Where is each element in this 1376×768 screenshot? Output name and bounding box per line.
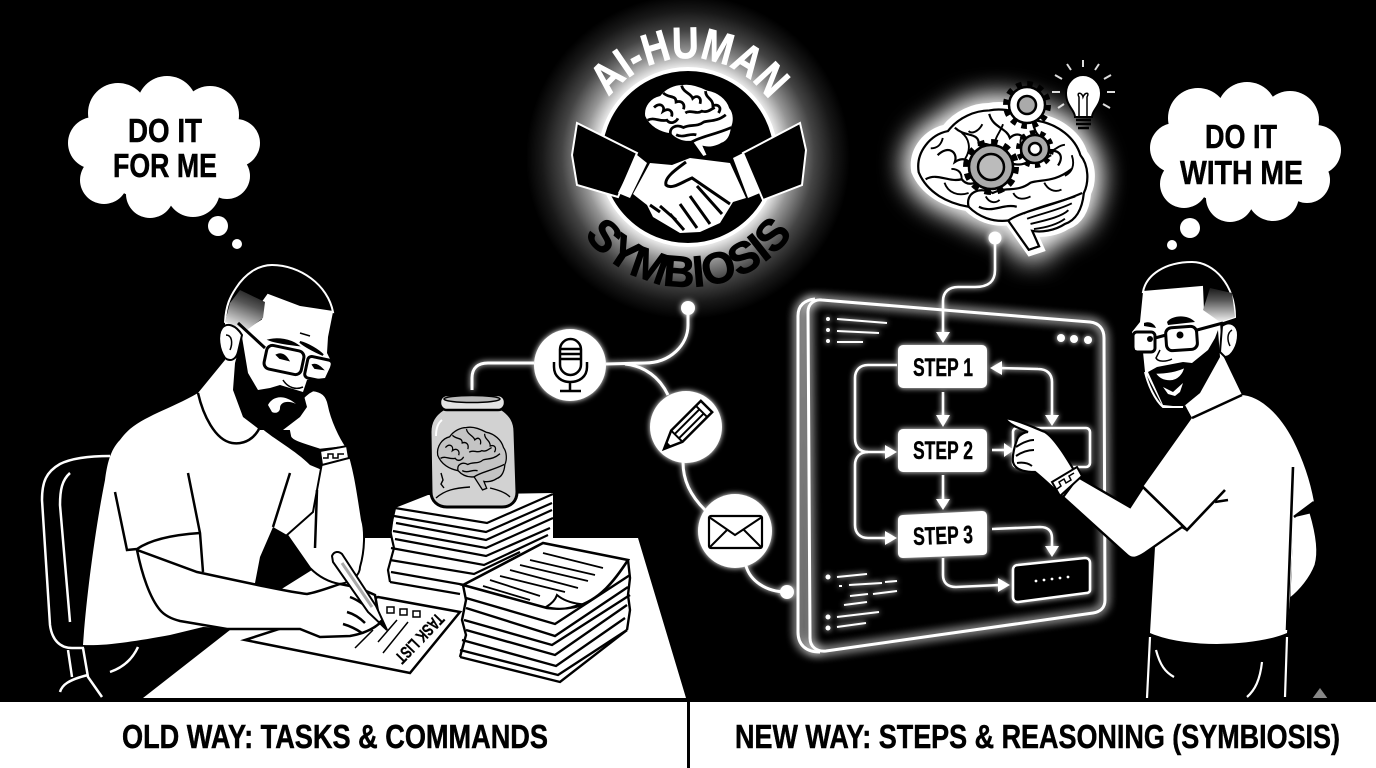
AI-HUMAN arched text: AI-HUMAN xyxy=(594,27,791,98)
hair fade xyxy=(1203,288,1235,322)
pointing arm xyxy=(1063,477,1187,558)
bracelet xyxy=(1052,467,1082,496)
ear xyxy=(219,325,242,360)
icon: lightbulb xyxy=(1052,60,1115,128)
hair xyxy=(1143,262,1235,322)
emblem disc xyxy=(600,69,776,245)
emblem xyxy=(532,0,844,313)
bubble text xyxy=(113,112,217,184)
face xyxy=(225,295,333,430)
task list sheet xyxy=(245,597,460,673)
right sleeve xyxy=(743,123,806,200)
face xyxy=(1132,287,1222,407)
output box lower xyxy=(1013,558,1090,602)
gear small xyxy=(1019,133,1051,165)
ear xyxy=(1220,323,1238,357)
flow arrows xyxy=(855,238,1052,587)
arrowheads xyxy=(885,332,1059,592)
glasses xyxy=(238,323,333,382)
hair xyxy=(225,265,333,330)
eyes and brows xyxy=(270,339,323,369)
list lines xyxy=(355,620,408,653)
code lines top xyxy=(826,317,887,343)
window dots xyxy=(1057,334,1092,344)
pointing hand xyxy=(1005,418,1078,497)
emblem glow xyxy=(526,0,850,319)
caption: old way: OLD WAY: TASKS & COMMANDS xyxy=(122,718,548,755)
step 2 xyxy=(898,429,987,472)
bubble text: WITH ME xyxy=(1180,154,1303,191)
node: emblem xyxy=(681,301,695,315)
beard xyxy=(233,337,307,430)
bubble text: FOR ME xyxy=(113,147,217,184)
collar xyxy=(198,393,260,443)
brain with gears xyxy=(914,60,1115,252)
bracelet xyxy=(320,446,349,465)
brain glow xyxy=(914,106,1091,252)
paper stack: front xyxy=(460,543,630,682)
desk xyxy=(143,538,686,698)
bottom caption bar xyxy=(0,698,1376,768)
node: panel xyxy=(780,585,794,599)
SYMBIOSIS arched text: SYMBIOSIS xyxy=(588,218,790,288)
thought bubble: do it with me xyxy=(1150,82,1341,250)
eyes and brows xyxy=(1144,316,1195,328)
glasses xyxy=(1133,323,1223,352)
task list label: TASK LIST xyxy=(391,609,448,667)
gear top xyxy=(1007,85,1047,125)
code lines bottom xyxy=(826,574,897,630)
neck xyxy=(198,360,260,443)
left sleeve xyxy=(572,123,637,197)
writing arm xyxy=(137,550,380,637)
person: old way, at desk xyxy=(83,265,380,645)
shirt xyxy=(1143,395,1314,644)
thought bubble: do it for me xyxy=(68,76,260,249)
step 1 xyxy=(898,345,987,388)
mouth xyxy=(268,397,296,413)
brain xyxy=(914,106,1091,252)
output box upper xyxy=(1013,428,1090,467)
bubble text: DO IT xyxy=(1205,118,1277,155)
icon: pencil xyxy=(650,391,722,463)
shirt seams xyxy=(1143,467,1314,630)
face outline highlight xyxy=(1145,372,1183,407)
watermark triangle xyxy=(1312,688,1328,699)
glowing workflow panel xyxy=(798,232,1105,652)
step 1: STEP 1 xyxy=(913,354,973,382)
checkboxes xyxy=(387,607,420,617)
hair fade xyxy=(225,290,265,330)
step 3: STEP 3 xyxy=(913,521,974,551)
connector network xyxy=(472,308,787,592)
icon: chair xyxy=(42,456,138,697)
emblem brain xyxy=(644,83,734,158)
panel frame xyxy=(798,299,1105,652)
back arm xyxy=(1290,513,1317,598)
shirt creases xyxy=(115,473,373,633)
icon: pencil in hand xyxy=(332,552,387,630)
smile xyxy=(1155,367,1185,381)
neck xyxy=(1185,345,1242,418)
goatee highlights xyxy=(1163,383,1183,396)
shirt torso xyxy=(83,393,322,645)
icon: brain in jar xyxy=(430,395,517,507)
step 2: STEP 2 xyxy=(913,437,973,465)
icon: microphone xyxy=(534,329,606,401)
raised forearm xyxy=(287,447,364,584)
page text lines xyxy=(483,553,603,600)
clasped hands xyxy=(633,158,746,233)
bubble text xyxy=(1180,118,1303,191)
step 3 xyxy=(898,511,987,558)
bubble text: DO IT xyxy=(128,112,202,149)
hand on cheek xyxy=(288,390,347,450)
paper stack: under jar xyxy=(388,493,553,594)
icon: envelope xyxy=(698,494,772,568)
person: new way, pointing at panel xyxy=(1005,262,1317,698)
pants outlines xyxy=(1147,637,1287,698)
node: brain xyxy=(988,232,1002,244)
right cuff xyxy=(733,153,760,198)
gear large xyxy=(967,143,1015,191)
left cuff xyxy=(618,155,647,198)
top sheet with curl xyxy=(463,543,628,609)
beard xyxy=(1148,330,1220,407)
